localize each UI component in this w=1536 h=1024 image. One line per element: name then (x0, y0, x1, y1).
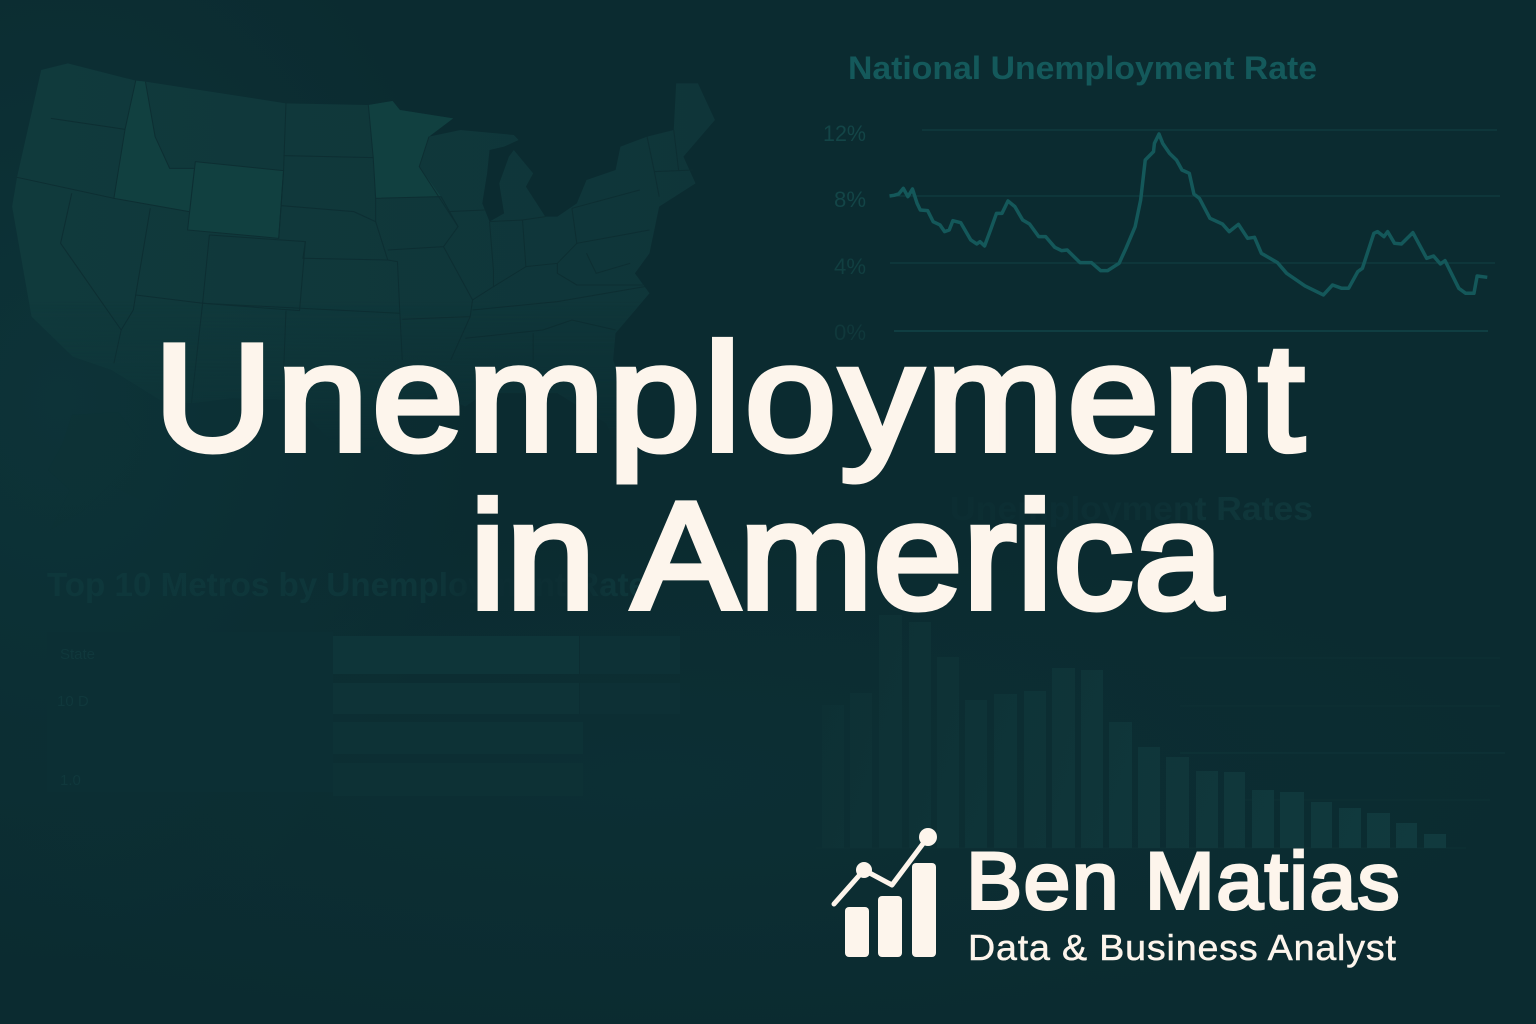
bar chart title: Unemployment Rates (950, 490, 1313, 527)
y axis labels: 0% (834, 320, 866, 345)
unemployment line (890, 134, 1487, 295)
bar chart gridlines (816, 658, 1505, 848)
map: highlighted Idaho (114, 81, 194, 212)
logo: author mark (834, 828, 937, 957)
table row labels: State (60, 646, 95, 663)
map: highlighted Wyoming (188, 162, 284, 238)
y axis labels: 8% (834, 187, 866, 212)
table row labels: 1.0 (60, 772, 81, 789)
panel: top 10 metros table (47, 566, 680, 796)
map: highlighted Minnesota (368, 101, 453, 198)
icon: trend line (834, 828, 937, 904)
bars (822, 615, 1446, 848)
chart: national unemployment rate (823, 50, 1500, 345)
author name: Ben Matias (966, 835, 1400, 926)
map: state borders (17, 80, 681, 358)
title (154, 313, 1304, 641)
table row labels: 10 D (57, 693, 89, 710)
map: contiguous states landmass (12, 64, 714, 354)
table row labels (57, 646, 95, 789)
y axis labels: 12% (823, 121, 866, 146)
table left column (47, 632, 333, 792)
title: in America (470, 471, 1223, 641)
y axis labels (823, 121, 866, 345)
chart title: National Unemployment Rate (848, 50, 1317, 86)
map: Alaska inset (48, 412, 140, 530)
background map of the United States (12, 64, 714, 354)
table bars (333, 636, 680, 796)
author role: Data & Business Analyst (968, 927, 1397, 968)
y axis labels: 4% (834, 254, 866, 279)
chart: unemployment rates bar chart (816, 490, 1505, 848)
chart gridlines (890, 130, 1500, 331)
icon: rising bars (845, 863, 936, 957)
title: Unemployment (154, 313, 1304, 483)
table title: Top 10 Metros by Unemployment Rate (47, 566, 647, 603)
